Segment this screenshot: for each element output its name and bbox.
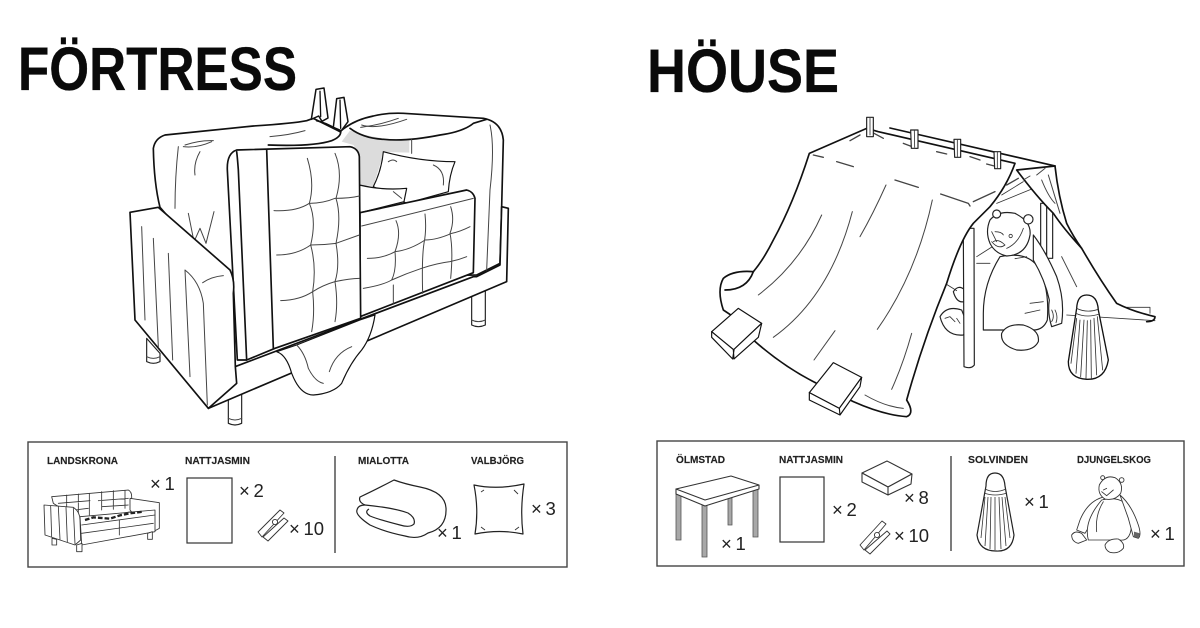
count: blanket: × 1: [437, 522, 462, 543]
count: sheet: × 2: [832, 499, 857, 520]
blanket lower edge: [268, 119, 487, 145]
label: DJUNGELSKOG: DJUNGELSKOG: [1077, 454, 1151, 466]
sofa base frame: [208, 207, 508, 408]
count: bear: × 1: [1150, 523, 1175, 544]
count: books: × 8: [904, 487, 929, 508]
hanging blanket: [277, 315, 375, 395]
icon: folded blanket: [357, 480, 446, 537]
label: SOLVINDEN: SOLVINDEN: [968, 454, 1028, 466]
sofa arm: [130, 207, 237, 408]
label: VALBJÖRG: VALBJÖRG: [471, 454, 524, 467]
blanket folds: [758, 133, 1018, 408]
main blanket: [720, 128, 1015, 417]
label: LANDSKRONA: LANDSKRONA: [47, 455, 118, 467]
title: FÖRTRESS: FÖRTRESS: [18, 35, 297, 103]
icon: pillow: [474, 484, 524, 534]
blanket fold lines: [175, 118, 492, 270]
book left: [712, 308, 762, 359]
pillow large: [373, 152, 455, 203]
icon: book: [862, 461, 912, 495]
clothespins: [311, 88, 348, 132]
count: clothespins: × 10: [894, 525, 929, 546]
count: lantern: × 1: [1024, 491, 1049, 512]
label: NATTJASMIN: NATTJASMIN: [779, 454, 843, 466]
upright quilt: [227, 147, 361, 360]
label: NATTJASMIN: NATTJASMIN: [185, 455, 250, 467]
struts and rear posts: [997, 182, 1155, 321]
back blanket: [890, 128, 1155, 322]
icon: clothespin: [258, 510, 288, 541]
icon: table: [676, 476, 759, 557]
front post: [963, 228, 974, 368]
icon: lantern: [977, 473, 1014, 551]
label: MIALOTTA: MIALOTTA: [358, 455, 409, 467]
label: ÖLMSTAD: ÖLMSTAD: [676, 453, 725, 466]
count: table: × 1: [721, 533, 746, 554]
count: sheet: × 2: [239, 480, 264, 501]
lantern: [1068, 295, 1108, 379]
sofa legs: [147, 290, 485, 425]
icon: teddy bear: [1072, 476, 1140, 553]
count: sofa: × 1: [150, 473, 175, 494]
illustration: blanket house: [712, 117, 1155, 417]
panel: house parts list: [657, 441, 1184, 566]
panel: fortress parts list: [28, 442, 567, 567]
blanket over sofa back: [153, 113, 503, 277]
icon: sofa: [44, 490, 159, 552]
title: HÖUSE: HÖUSE: [647, 37, 839, 105]
folded quilt on right seat: [360, 190, 475, 317]
icon: clothespin: [860, 521, 890, 554]
grey shadow behind blanket: [342, 131, 409, 186]
book front: [809, 363, 862, 415]
icon: sheet: [780, 477, 824, 542]
count: pillows: × 3: [531, 498, 556, 519]
pillow small: [359, 185, 407, 213]
illustration: sofa fortress: [130, 88, 508, 425]
teddy bear: [940, 210, 1063, 350]
count: clothespins: × 10: [289, 518, 324, 539]
clothespins on pole: [867, 117, 1001, 169]
icon: sheet: [187, 478, 232, 543]
